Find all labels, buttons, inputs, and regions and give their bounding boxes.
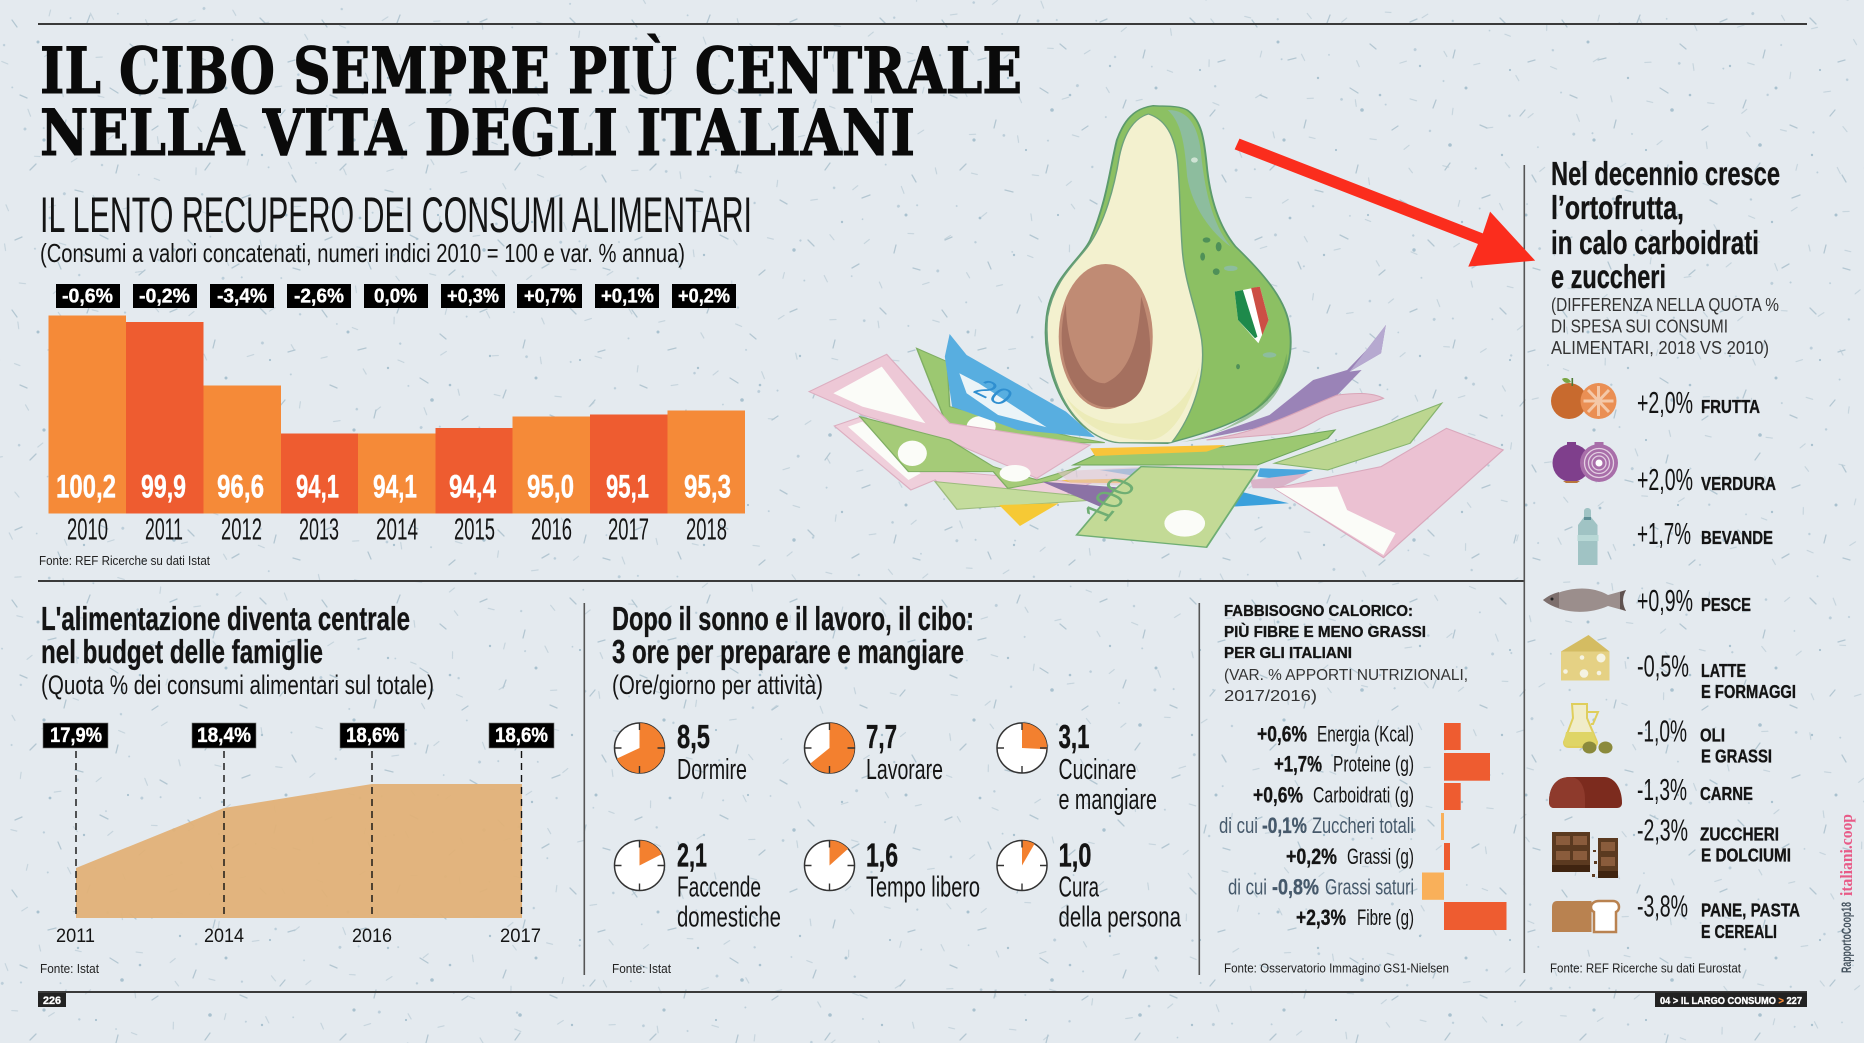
label: bevande [1637,516,1773,551]
clock: cura della persona: Cura [1058,872,1100,904]
bar chart: apporti nutrizionali [1219,722,1506,930]
clock: cucinare e mangiare [997,718,1157,816]
clock: dormire [614,718,747,786]
clock: cura della persona: della persona [1058,902,1182,934]
icon: bread [1552,901,1619,932]
source: consumi: Fonte: REF Ricerche su dati Istat [39,553,210,568]
icon: bottle [1578,508,1598,565]
bar chart: apporti nutrizionali: +0,6% [1257,722,1307,746]
heading: fabbisogno calorico: FABBISOGNO CALORICO: [1224,603,1413,620]
clock: cucinare e mangiare: 3,1 [1058,718,1090,755]
heading: ore per attività [612,600,974,700]
bar chart: consumi alimentari: -0,2% [139,286,190,308]
bar chart: apporti nutrizionali: Energia (Kcal) [1317,722,1414,746]
vertical credit: italiani.coop [1837,814,1856,896]
heading: ortofrutta: l’ortofrutta, [1551,189,1684,226]
illustration: avocado on banknotes [809,106,1503,558]
panel: fabbisogno calorico [1219,603,1506,976]
icon: italian flag shield [1235,287,1269,343]
bar chart: consumi alimentari: 99,9 [141,468,186,504]
label: zuccheri e dolciumi: ZUCCHERI [1700,824,1779,844]
bar chart: apporti nutrizionali: +2,3% [1296,905,1346,930]
heading: consumi alimentari: IL LENTO RECUPERO DEI CONSUMI ALIMENTARI [40,187,752,243]
clock: lavorare [804,718,943,786]
bar chart: consumi alimentari: 95,1 [606,468,649,504]
heading: fabbisogno calorico: 2017/2016) [1224,688,1317,705]
label: carne [1637,772,1753,807]
bar chart: consumi alimentari: 95,0 [527,468,574,504]
clock: cura della persona: 1,0 [1058,836,1092,874]
heading: ortofrutta: Nel decennio cresce [1551,155,1780,192]
heading: fabbisogno calorico: PER GLI ITALIANI [1224,645,1352,662]
heading: ortofrutta: in calo carboidrati [1551,224,1759,261]
clock: faccende domestiche: Faccende [677,872,761,904]
heading: fabbisogno calorico: (VAR. % APPORTI NUTRIZIONALI, [1224,667,1468,684]
page number left: 226 [43,995,61,1007]
bar chart: consumi alimentari: 2010 [67,512,108,546]
bar chart: apporti nutrizionali: Grassi (g) [1347,844,1414,869]
heading: fabbisogno calorico: PIÙ FIBRE E MENO GRASSI [1224,622,1426,641]
bar chart: consumi alimentari: -2,6% [294,286,344,308]
label: oli e grassi: OLI [1700,726,1725,746]
bar chart: consumi alimentari: -0,6% [62,286,113,308]
bar chart: apporti nutrizionali: +1,7% [1274,752,1322,776]
icon: cheese [1561,635,1610,680]
illustration: avocado on banknotes: 100 [1075,473,1145,526]
area chart: quota alimentare: 2011 [56,926,95,947]
label: zuccheri e dolciumi: E DOLCIUMI [1701,846,1791,866]
label: verdura: +2,0% [1637,462,1693,497]
bar chart: apporti nutrizionali: +0,6% [1253,782,1303,808]
clock: cucinare e mangiare: Cucinare [1058,754,1136,786]
area chart: quota alimentare: 17,9% [50,724,102,747]
bar chart: apporti nutrizionali: Zuccheri totali [1312,813,1414,838]
bar chart: apporti nutrizionali: Fibre (g) [1357,905,1414,930]
area chart: quota alimentare [43,723,554,947]
bar chart: apporti nutrizionali: Grassi saturi [1325,874,1414,900]
heading: consumi alimentari [40,187,752,268]
title: NELLA VITA DEGLI ITALIANI [40,96,915,171]
clock: dormire: 8,5 [677,718,710,755]
bar chart: apporti nutrizionali: +0,2% [1286,844,1337,869]
bar chart: consumi alimentari: +0,7% [524,286,576,308]
bar chart: consumi alimentari: +0,1% [601,286,654,308]
title [40,34,1022,171]
clock: lavorare: 7,7 [866,718,897,755]
bar chart: apporti nutrizionali: di cui [1219,813,1258,838]
bar chart: consumi alimentari: 94,4 [449,468,496,504]
arrow: red pointing to panel [1235,139,1535,267]
bar chart: apporti nutrizionali: Proteine (g) [1333,752,1414,776]
panel: ortofrutta [1543,155,1800,976]
label: bevande: +1,7% [1637,516,1691,551]
label: oli e grassi [1637,714,1772,766]
icon: meat [1549,777,1622,808]
page number right: 04 > IL LARGO CONSUMO > 227 [1660,995,1802,1007]
clock: tempo libero [804,836,980,904]
subheading: ortofrutta: (DIFFERENZA NELLA QUOTA % [1551,295,1779,315]
label: verdura [1637,462,1776,497]
bar chart: consumi alimentari: 0,0% [374,286,417,308]
label: pesce: PESCE [1701,595,1751,615]
clock: faccende domestiche: domestiche [677,902,781,934]
area chart: quota alimentare: 18,6% [346,724,399,747]
clock: tempo libero: 1,6 [866,836,898,874]
label: latte e formaggi: E FORMAGGI [1701,682,1796,702]
bar chart: consumi alimentari: 2015 [454,512,495,546]
heading: ore per attività: 3 ore per preparare e mangiare [612,633,964,670]
clock: faccende domestiche [614,836,781,934]
bar chart: consumi alimentari: 2017 [608,512,649,546]
panel: quota alimentazione [40,600,554,976]
label: pane pasta e cereali [1637,888,1800,942]
bar chart: consumi alimentari: -3,4% [217,286,267,308]
heading: ore per attività: Dopo il sonno e il lavoro, il cibo: [612,600,974,637]
bar chart: consumi alimentari: +0,3% [447,286,499,308]
label: carne: -1,3% [1637,772,1687,807]
bar chart: consumi alimentari: 2011 [145,512,183,546]
label: latte e formaggi: LATTE [1701,661,1746,681]
bar chart: consumi alimentari: 2013 [299,512,339,546]
bar chart: consumi alimentari: +0,2% [678,286,730,308]
clock: dormire: Dormire [677,754,747,786]
bar chart: consumi alimentari: 94,1 [373,468,417,504]
source: istat ore: Fonte: Istat [612,961,671,976]
subheading: ortofrutta [1551,295,1779,358]
label: zuccheri e dolciumi [1637,812,1791,866]
heading: ore per attività: (Ore/giorno per attività) [612,670,823,700]
bar chart: consumi alimentari [48,284,745,546]
label: oli e grassi: -1,0% [1637,714,1687,748]
icon: chocolate [1552,832,1618,878]
heading: budget famiglie: L'alimentazione diventa centrale [41,600,410,637]
label: frutta: +2,0% [1637,385,1693,420]
subheading: ortofrutta: ALIMENTARI, 2018 VS 2010) [1551,338,1769,358]
panel: ore per attività [612,600,1182,976]
heading: budget famiglie: (Quota % dei consumi alimentari sul totale) [41,670,434,700]
icon: fruit [1551,378,1616,419]
label: carne: CARNE [1700,784,1753,804]
icon: onion [1552,442,1618,483]
label: latte e formaggi: -0,5% [1637,648,1689,684]
icon: oil and olives [1564,704,1612,754]
heading: fabbisogno calorico [1224,603,1468,705]
label: pesce: +0,9% [1637,583,1693,618]
label: pane pasta e cereali: E CEREALI [1701,922,1777,942]
heading: consumi alimentari: (Consumi a valori concatenati, numeri indici 2010 = 100 e var. % annua) [40,238,685,268]
bar chart: consumi alimentari: 2012 [221,512,262,546]
title: IL CIBO SEMPRE PIÙ CENTRALE [40,34,1022,109]
area chart: quota alimentare: 18,4% [197,724,251,747]
bar chart: consumi alimentari: 96,6 [217,468,264,504]
clock: cura della persona [997,836,1182,934]
bar chart: consumi alimentari: 2016 [531,512,572,546]
bar chart: consumi alimentari: 94,1 [296,468,339,504]
source: osservatorio: Fonte: Osservatorio Immagino GS1-Nielsen [1224,960,1449,976]
clock: lavorare: Lavorare [866,754,943,786]
bar chart: consumi alimentari: 100,2 [56,468,116,504]
clock: faccende domestiche: 2,1 [677,836,707,874]
heading: budget famiglie [41,600,434,700]
heading: ortofrutta: e zuccheri [1551,258,1666,295]
label: pane pasta e cereali: PANE, PASTA [1701,900,1800,920]
label: bevande: BEVANDE [1701,528,1773,548]
heading: ortofrutta [1551,155,1780,295]
label: zuccheri e dolciumi: -2,3% [1637,812,1688,848]
bar chart: consumi alimentari: 95,3 [684,468,731,504]
heading: budget famiglie: nel budget delle famiglie [41,633,323,670]
icon: fish [1543,589,1626,612]
bar chart: consumi alimentari: 2018 [686,512,727,546]
label: oli e grassi: E GRASSI [1701,746,1772,766]
vertical credit: RapportoCoop18 [1838,902,1854,973]
bar chart: apporti nutrizionali: di cui [1228,874,1267,900]
clock: cucinare e mangiare: e mangiare [1058,784,1157,816]
bar chart: apporti nutrizionali: -0,1% [1262,813,1307,838]
label: verdura: VERDURA [1701,474,1776,494]
subheading: ortofrutta: DI SPESA SUI CONSUMI [1551,316,1728,336]
vertical credit [1837,814,1856,973]
label: latte e formaggi [1637,648,1796,702]
bar chart: consumi alimentari: 2014 [376,512,418,546]
source: ortofrutta: Fonte: REF Ricerche su dati Eurostat [1550,960,1741,976]
area chart: quota alimentare: 2017 [500,926,541,947]
label: pane pasta e cereali: -3,8% [1637,888,1688,924]
area chart: quota alimentare: 2014 [204,926,244,947]
bar chart: apporti nutrizionali: Carboidrati (g) [1313,782,1414,808]
bar chart: apporti nutrizionali: -0,8% [1272,874,1319,900]
area chart: quota alimentare: 18,6% [495,724,548,747]
source: istat: Fonte: Istat [40,961,99,976]
clock: tempo libero: Tempo libero [866,872,980,904]
area chart: quota alimentare: 2016 [352,926,392,947]
label: frutta: FRUTTA [1701,397,1760,417]
page number left [38,993,66,1007]
illustration: avocado on banknotes: 20 [967,375,1019,411]
